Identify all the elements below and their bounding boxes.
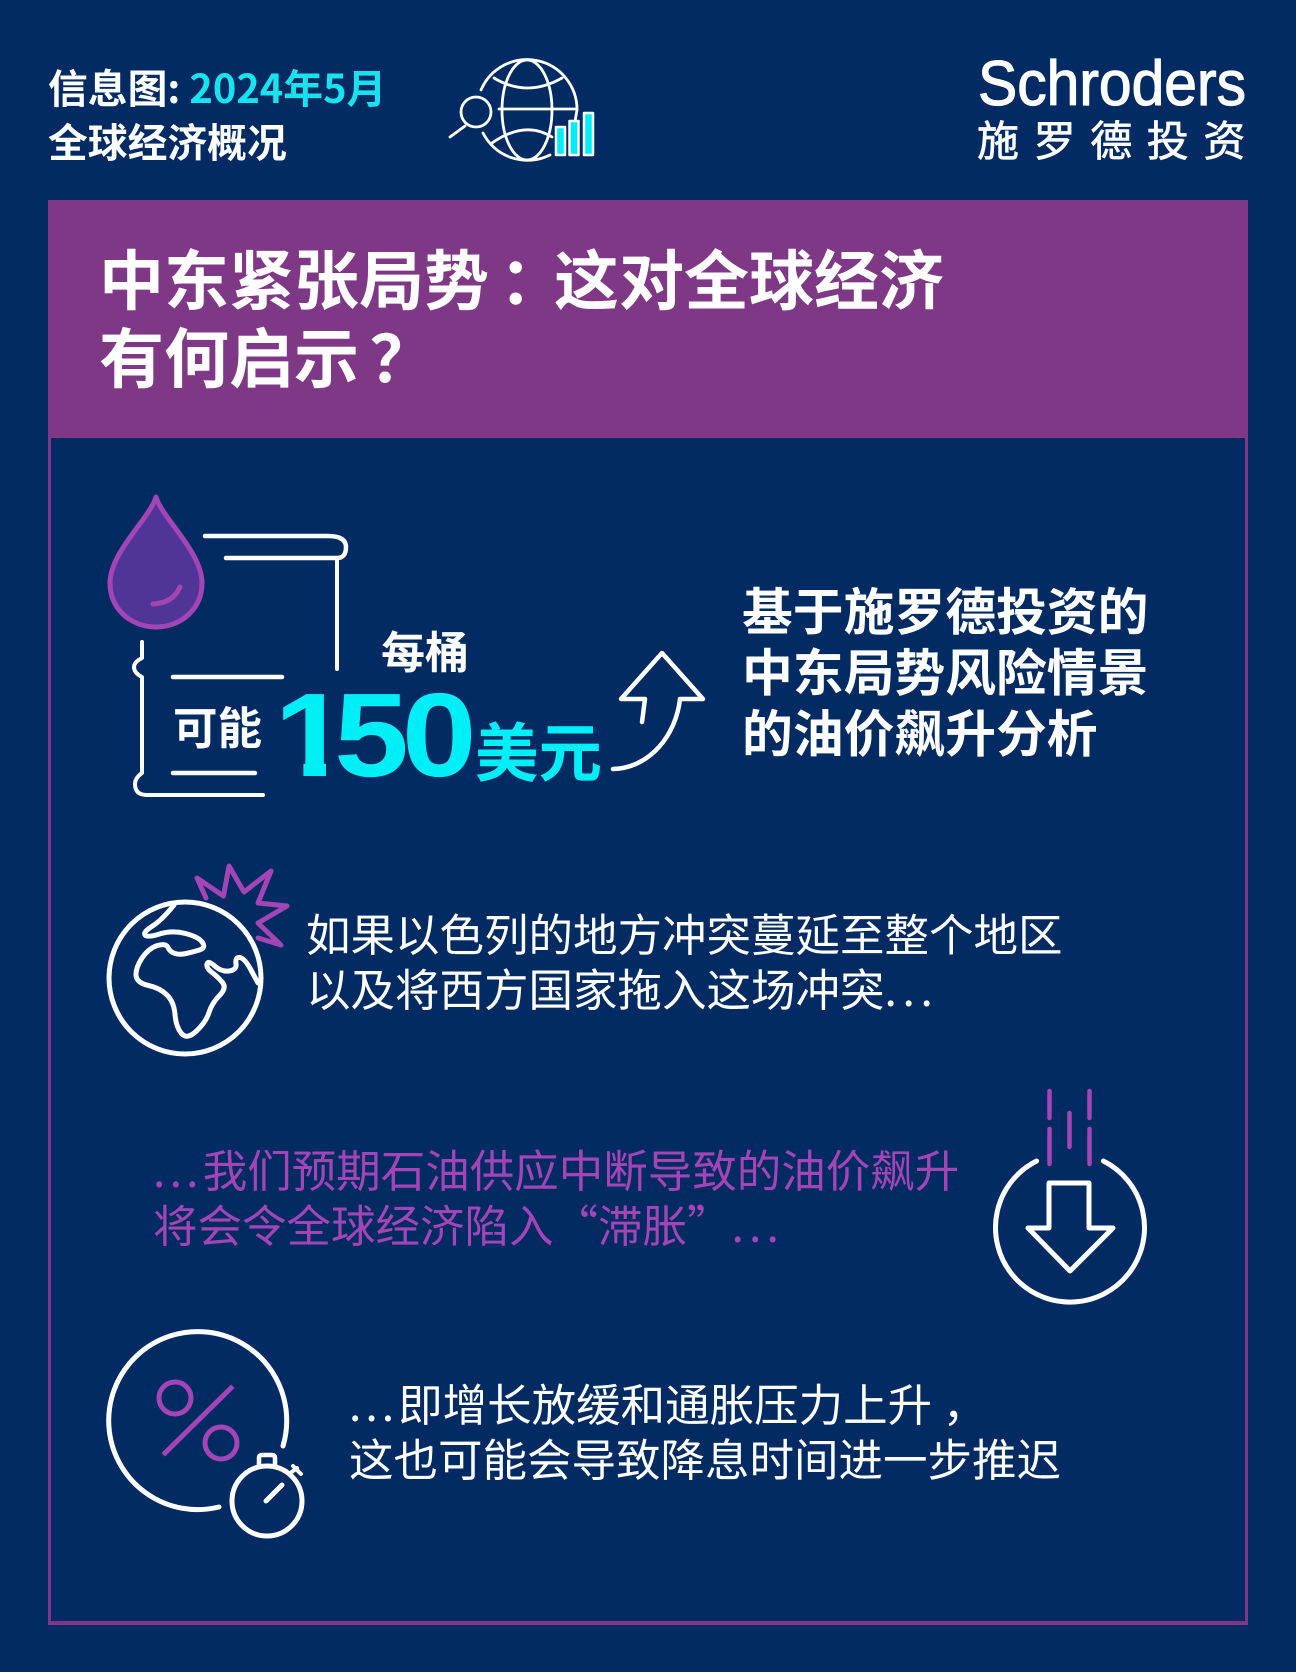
icon: earth with conflict burst bbox=[109, 866, 287, 1054]
text: conflict spreads: 如果以色列的地方冲突蔓延至整个地区 bbox=[306, 898, 1063, 964]
panel: main content frame bbox=[48, 200, 1248, 1625]
icon: oil drop bbox=[110, 497, 202, 627]
title: 有何启示？ bbox=[99, 307, 435, 401]
text: US dollars: 美元 bbox=[475, 703, 602, 795]
text: stagflation: ” bbox=[687, 1190, 732, 1254]
text: conflict spreads: 以及将西方国家拖入这场冲突... bbox=[306, 954, 938, 1018]
icon: globe with magnifier and bars bbox=[450, 60, 593, 160]
header label: 信息图: 2024年5月 bbox=[48, 58, 386, 115]
panel: purple title banner bbox=[48, 200, 1248, 438]
text: rate cuts delayed: ...即增长放缓和通胀压力上升， bbox=[349, 1369, 987, 1434]
header label: 全球经济概况 bbox=[48, 112, 287, 169]
title: 中东紧张局势：这对全球经济 bbox=[99, 229, 944, 323]
text: stagflation: ...我们预期石油供应中断导致的油价飙升 bbox=[153, 1135, 959, 1200]
text: oil price scenario: 中东局势风险情景 bbox=[742, 632, 1148, 706]
text: rate cuts delayed: 这也可能会导致降息时间进一步推迟 bbox=[349, 1424, 1061, 1488]
text: oil price scenario: 的油价飙升分析 bbox=[742, 693, 1098, 767]
text: rate cuts delayed bbox=[349, 1369, 1061, 1488]
header label bbox=[48, 58, 386, 169]
text: per barrel: 每桶 bbox=[381, 617, 469, 681]
number: 150: 1 bbox=[274, 669, 334, 802]
icon: percent circle with stopwatch bbox=[109, 1332, 302, 1536]
text: oil price scenario bbox=[742, 571, 1148, 767]
number: 150: 50 bbox=[334, 669, 469, 802]
text: stagflation: 将会令全球经济陷入 滞胀 ... bbox=[153, 1190, 784, 1254]
title bbox=[99, 229, 944, 401]
text: conflict spreads bbox=[306, 898, 1063, 1018]
icon: falling arrow in circle bbox=[996, 1091, 1144, 1302]
icon: oil barrel outline bbox=[134, 536, 346, 795]
arrow: price rising bbox=[613, 653, 703, 769]
text: stagflation: “ bbox=[554, 1190, 598, 1254]
text: stagflation bbox=[153, 1135, 959, 1254]
text: oil price scenario: 基于施罗德投资的 bbox=[742, 571, 1148, 645]
text: possibly: 可能 bbox=[173, 692, 262, 757]
logo: Schroders bbox=[977, 50, 1248, 166]
